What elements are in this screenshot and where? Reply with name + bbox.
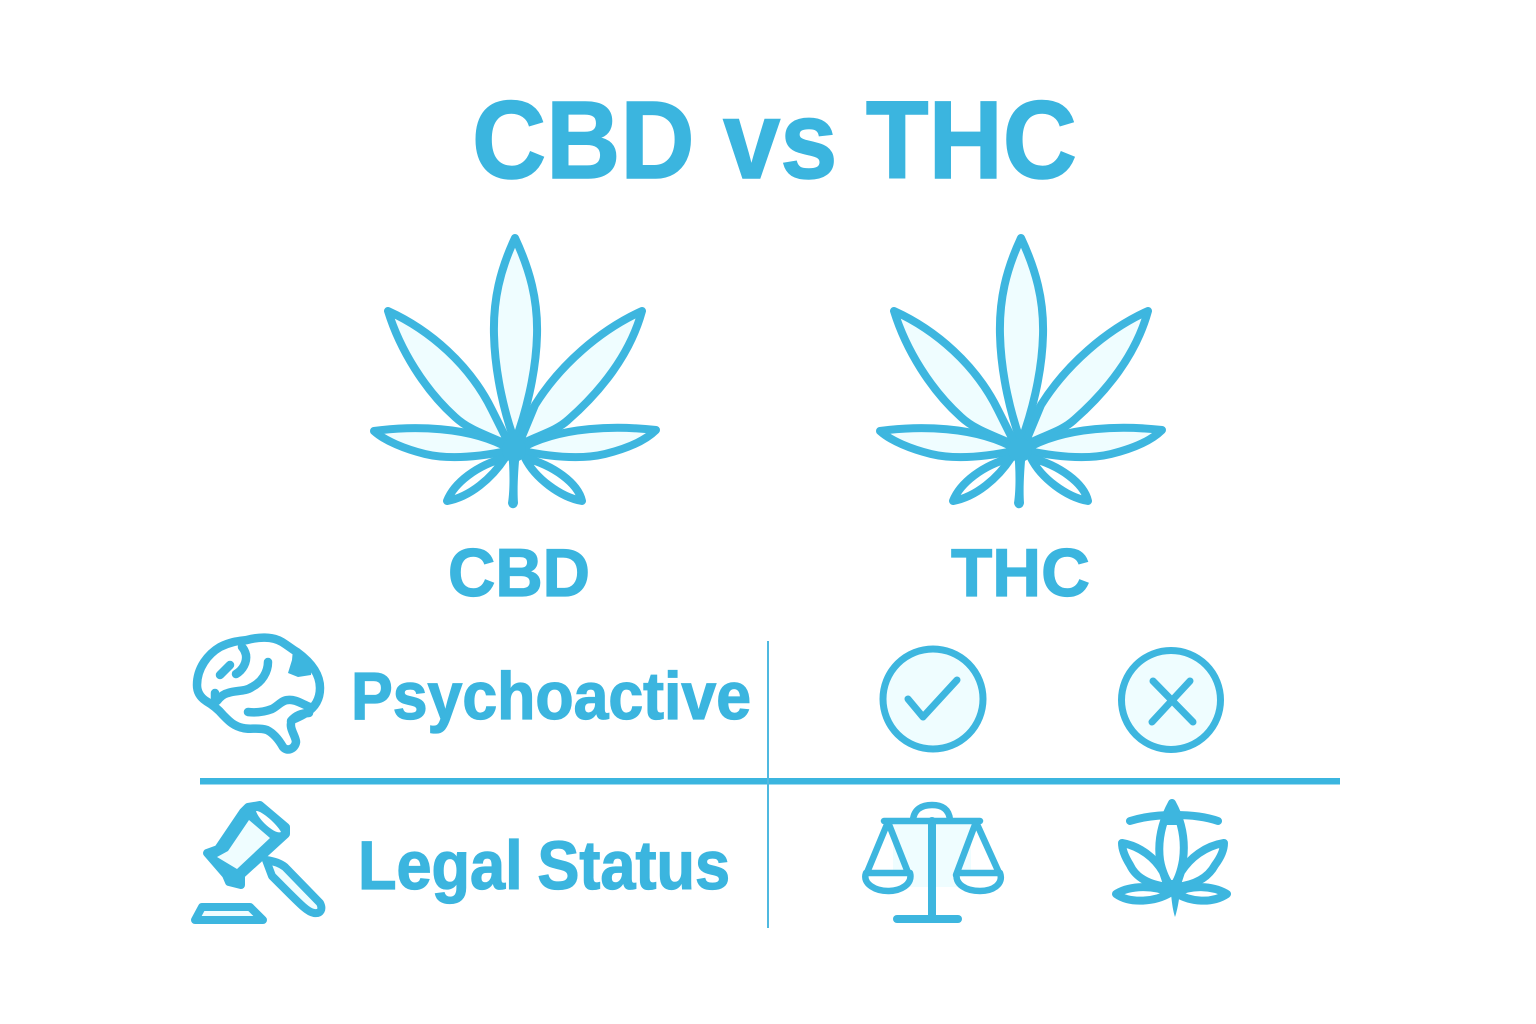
icon: check mark in circle xyxy=(883,649,983,749)
column heading: THC: THC xyxy=(951,535,1090,611)
column heading: CBD: CBD xyxy=(448,535,590,611)
icon: CBD cannabis leaf xyxy=(374,238,656,508)
icon: brain xyxy=(197,638,320,749)
icon: cannabis leaf with scale bar xyxy=(1116,800,1227,917)
icon: balance scales xyxy=(865,805,1001,919)
row label: Legal Status: Legal Status xyxy=(358,827,730,904)
title: CBD vs THC xyxy=(472,79,1077,202)
table dividers xyxy=(200,641,1340,928)
icon: cross in circle xyxy=(1122,650,1220,750)
icon: THC cannabis leaf xyxy=(880,238,1162,508)
row label: Psychoactive: Psychoactive xyxy=(351,659,751,734)
icon: gavel xyxy=(195,805,321,920)
